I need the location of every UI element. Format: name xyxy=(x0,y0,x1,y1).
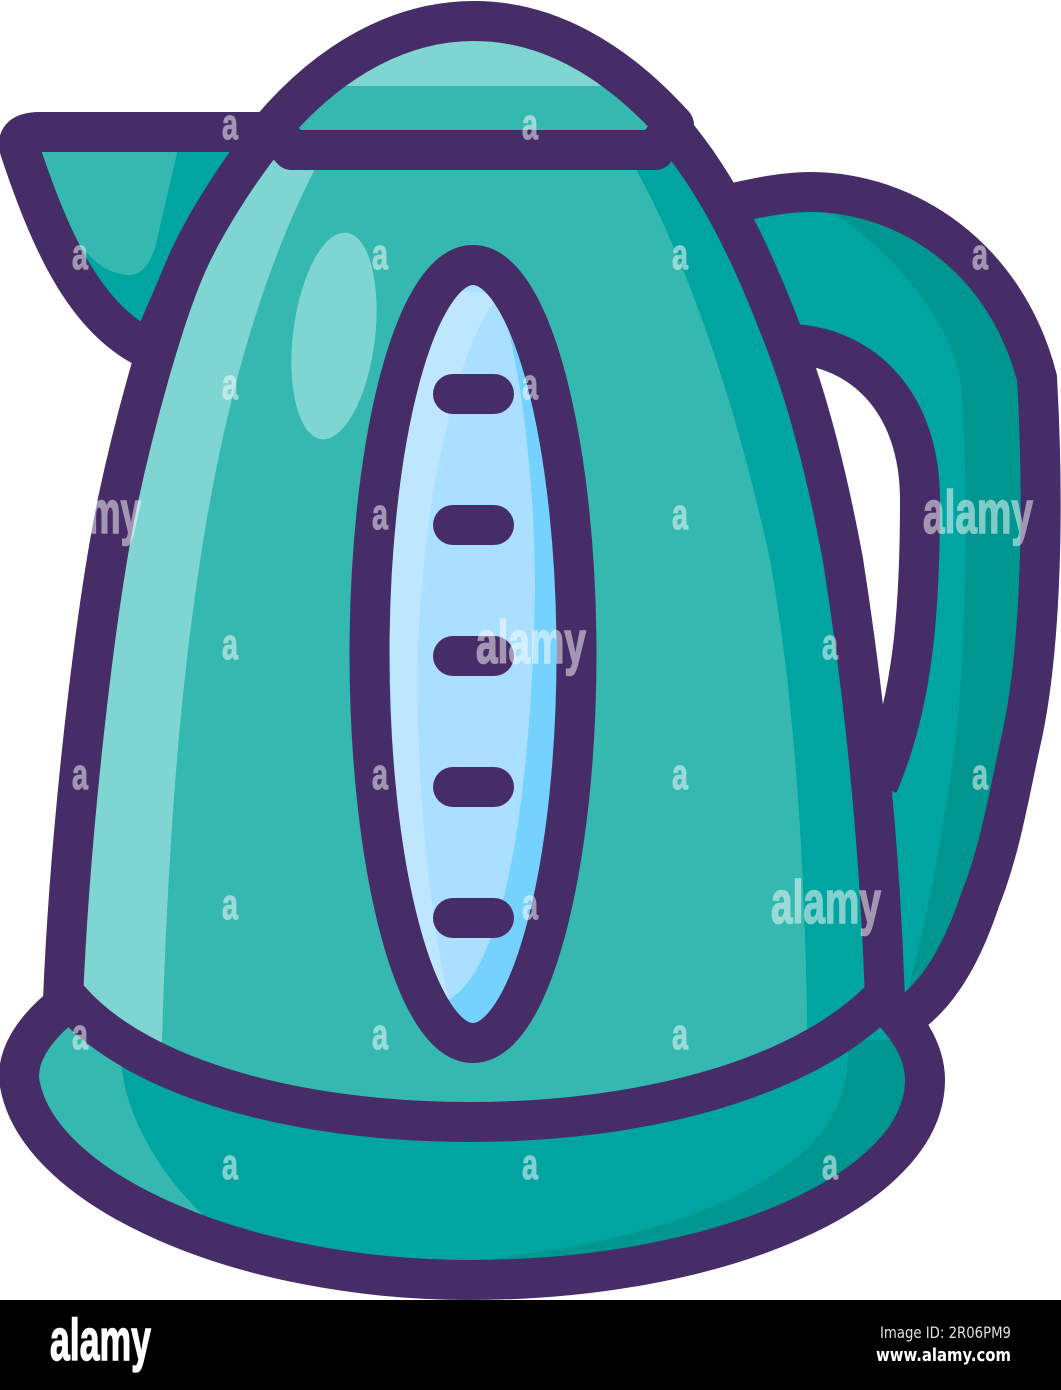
watermarks: a xyxy=(822,1140,838,1189)
watermarks xyxy=(72,100,1033,1189)
base xyxy=(0,1000,950,1300)
watermarks: a xyxy=(222,100,238,149)
watermarks: a xyxy=(222,620,238,669)
watermarks: a xyxy=(372,490,388,539)
watermarks: a xyxy=(222,1140,238,1189)
watermarks: a xyxy=(222,360,238,409)
watermarks: a xyxy=(672,750,688,799)
image id: Image ID: 2R06PM9 xyxy=(880,1323,1011,1342)
watermarks: a xyxy=(822,620,838,669)
water level window xyxy=(370,265,576,1043)
handle xyxy=(725,190,1060,1010)
watermarks: my xyxy=(88,479,141,546)
watermarks: a xyxy=(372,1010,388,1059)
watermarks: alamy xyxy=(771,869,881,936)
footer logo: alamy xyxy=(50,1308,151,1373)
watermarks: a xyxy=(372,230,388,279)
kettle body xyxy=(40,130,920,1125)
watermarks: alamy xyxy=(476,609,586,676)
watermarks: a xyxy=(972,230,988,279)
oval glare xyxy=(281,228,387,444)
watermarks: a xyxy=(522,100,538,149)
body left highlight xyxy=(84,160,314,1042)
watermarks: a xyxy=(672,490,688,539)
watermarks: a xyxy=(522,1140,538,1189)
watermarks: a xyxy=(72,1010,88,1059)
watermarks: a xyxy=(522,360,538,409)
watermarks: a xyxy=(672,230,688,279)
watermarks: a xyxy=(222,880,238,929)
watermarks: a xyxy=(72,230,88,279)
footer bar xyxy=(0,1300,1061,1390)
spout xyxy=(19,132,270,350)
lid xyxy=(250,0,700,150)
website: www.alamy.com xyxy=(876,1345,1011,1366)
watermarks: a xyxy=(972,750,988,799)
watermarks: a xyxy=(372,750,388,799)
watermarks: a xyxy=(72,750,88,799)
body right shadow band xyxy=(636,162,864,1030)
watermarks: a xyxy=(522,880,538,929)
level marks xyxy=(433,374,514,938)
watermarks: a xyxy=(672,1010,688,1059)
